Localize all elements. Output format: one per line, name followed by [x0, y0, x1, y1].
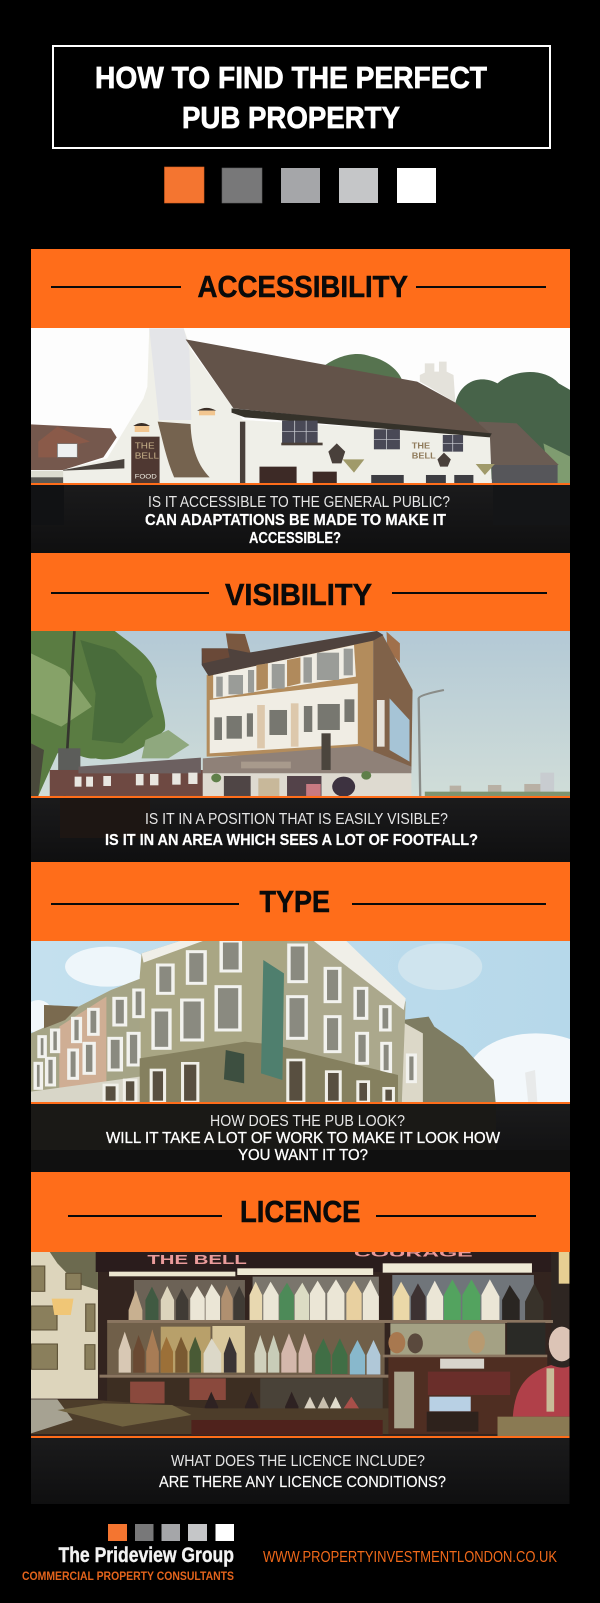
shelf row 1	[134, 1280, 245, 1322]
top sign	[96, 1252, 555, 1272]
hanging sign	[224, 1050, 244, 1083]
counter	[31, 1399, 388, 1434]
heading: accessibility: ACCESSIBILITY	[198, 269, 408, 304]
clouds	[65, 947, 149, 987]
photo: The Bell pub exterior: FOOD	[135, 473, 157, 480]
left terrace	[31, 978, 140, 1092]
ground floor	[203, 773, 411, 796]
top floor white	[213, 645, 356, 698]
ground floor	[140, 1042, 398, 1102]
heading: type: TYPE	[260, 884, 330, 919]
logo squares	[108, 1524, 234, 1541]
light strips	[109, 1272, 235, 1276]
roof	[186, 339, 492, 435]
main walls	[63, 328, 492, 483]
windows	[35, 941, 415, 1088]
caption text: HOW DOES THE PUB LOOK?	[210, 1113, 405, 1130]
title: HOW TO FIND THE PERFECT	[95, 60, 487, 95]
caption panel: accessibility: ACCESSIBLE?	[249, 530, 341, 547]
caption panel: visibility	[31, 796, 570, 862]
drainpipe	[240, 422, 245, 483]
photo: The Bell bar interior: COURAGE	[354, 1246, 473, 1259]
side face	[373, 635, 413, 770]
sign	[131, 437, 160, 483]
photo: The Bell bar interior: THE BELL	[147, 1253, 247, 1267]
right back cabinet	[388, 1357, 547, 1434]
photo: Prince of Teck pub exterior	[31, 941, 570, 1102]
lamps and baskets	[197, 408, 216, 411]
low building	[50, 770, 203, 796]
caption panel: licence	[31, 1436, 570, 1504]
caption panel: type: WILL IT TAKE A LOT OF WORK TO MAKE IT LOOK HOW	[106, 1130, 500, 1147]
heading: licence: LICENCE	[240, 1194, 360, 1229]
right low building	[478, 422, 559, 465]
road sign	[525, 1070, 537, 1102]
main side	[279, 941, 406, 1102]
middle floor white	[210, 683, 358, 753]
lettering on wall: THE	[412, 441, 430, 450]
panel: accessibility heading band	[31, 249, 570, 328]
roofline	[202, 631, 383, 676]
photo: The Crown pub exterior	[31, 631, 570, 797]
shelf	[107, 1320, 553, 1323]
pub sign post	[321, 733, 331, 770]
caption panel: licence: ARE THERE ANY LICENCE CONDITIONS?	[159, 1474, 446, 1491]
caption panel: accessibility: CAN ADAPTATIONS BE MADE TO MAKE IT	[145, 512, 447, 529]
scoop roof	[158, 422, 210, 477]
photo: The Bell bar interior	[31, 1246, 575, 1439]
caption panel: visibility: IS IT IN AN AREA WHICH SEES A LOT OF FOOTFALL?	[105, 832, 478, 849]
chimney stack	[420, 362, 455, 403]
tagline: COMMERCIAL PROPERTY CONSULTANTS	[22, 1569, 234, 1583]
footer logo	[22, 1524, 234, 1583]
heading: visibility: VISIBILITY	[225, 577, 372, 612]
photo: The Bell pub exterior: BELL	[412, 451, 436, 460]
title box: PUB PROPERTY	[182, 100, 400, 135]
photo: The Bell pub exterior	[31, 328, 570, 483]
photo: The Bell pub exterior: THE	[135, 441, 155, 450]
chimney shade	[149, 328, 191, 420]
main front brick	[207, 640, 373, 757]
caption panel: type: YOU WANT IT TO?	[238, 1147, 368, 1164]
distant towers	[450, 786, 462, 792]
trees	[455, 372, 570, 483]
panel: visibility heading band	[31, 553, 570, 631]
caption panel: accessibility	[31, 483, 570, 553]
caption text: IS IT ACCESSIBLE TO THE GENERAL PUBLIC?	[148, 494, 450, 511]
caption text: WHAT DOES THE LICENCE INCLUDE?	[171, 1453, 425, 1470]
wall lamp	[52, 1299, 73, 1315]
doors and ground-floor windows	[259, 467, 297, 483]
panel: type heading band	[31, 862, 570, 941]
caption panel: type	[31, 1102, 570, 1172]
left neighbouring house	[31, 424, 117, 470]
barman	[513, 1365, 569, 1417]
beer taps and lower shelf	[107, 1375, 388, 1433]
tree	[31, 631, 165, 796]
right dark	[551, 1252, 570, 1439]
main front	[140, 941, 287, 1058]
caption text: IS IT IN A POSITION THAT IS EASILY VISIBLE?	[145, 811, 448, 828]
far right terrace	[402, 1017, 496, 1102]
lamp post	[419, 690, 444, 796]
shelf row 2	[107, 1323, 385, 1375]
logo squares row	[164, 167, 436, 203]
panel: licence heading band	[31, 1172, 570, 1252]
fascia	[203, 746, 411, 773]
side detail	[377, 700, 385, 747]
windows	[282, 421, 318, 443]
company name: The Prideview Group	[58, 1544, 234, 1567]
title box	[53, 46, 550, 148]
wall left	[31, 1252, 98, 1399]
chimneys	[226, 633, 250, 653]
photo: The Bell pub exterior: BELL	[135, 451, 159, 460]
green sign	[261, 960, 284, 1080]
